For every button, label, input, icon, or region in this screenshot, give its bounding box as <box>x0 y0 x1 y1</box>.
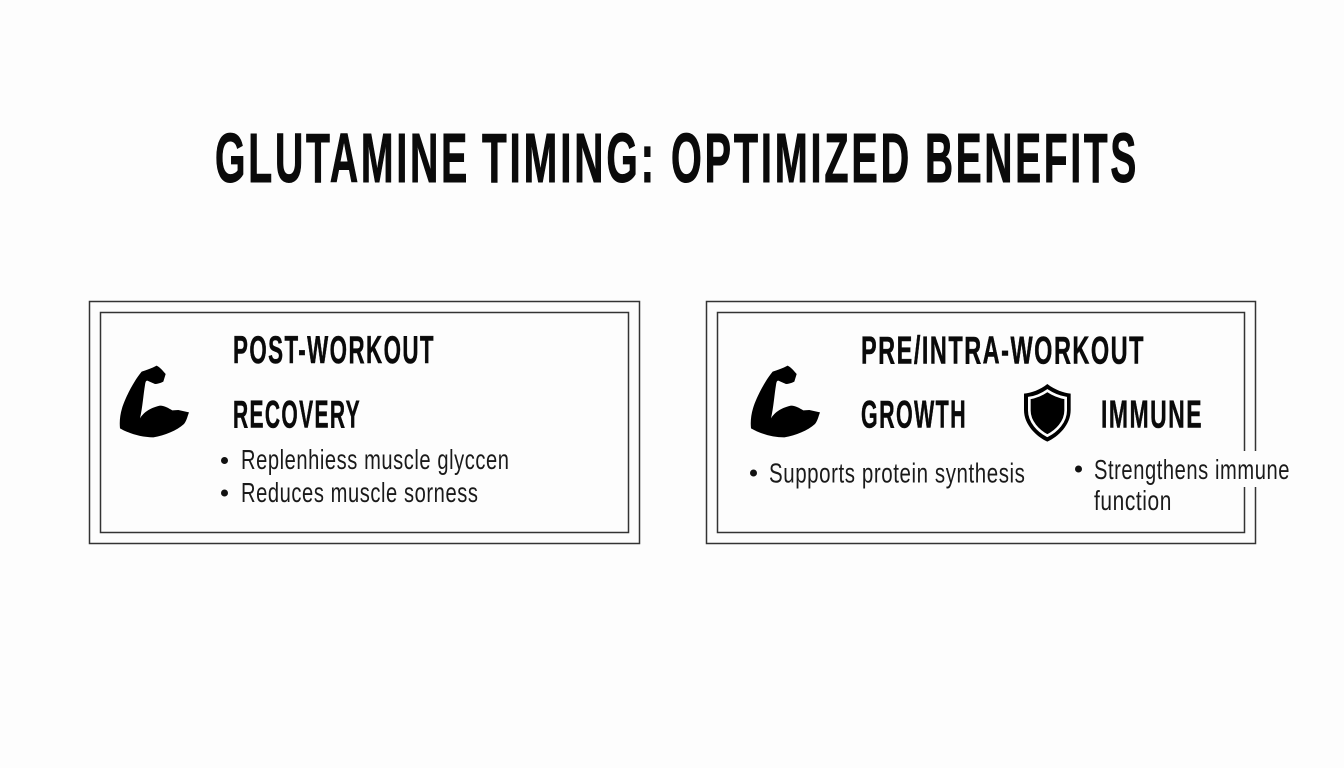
bullet: growth benefit: Supports protein synthesis <box>769 458 1026 488</box>
bullet: immune benefit <box>1075 454 1290 516</box>
bullet list: recovery benefits: Reduces muscle sorness <box>241 477 478 508</box>
title: GLUTAMINE <box>215 119 470 197</box>
panel frame: pre/intra-workout double border <box>706 302 1260 544</box>
heading: post-workout: POST-WORKOUT <box>233 329 435 372</box>
title: TIMING: <box>482 119 657 197</box>
title <box>215 119 1139 197</box>
bullet: growth benefit <box>750 458 1026 488</box>
heading: recovery: RECOVERY <box>233 394 361 436</box>
title: BENEFITS <box>925 119 1139 197</box>
icon: shield <box>1024 384 1071 442</box>
heading: immune: IMMUNE <box>1101 394 1203 436</box>
panel: post-workout <box>90 302 640 544</box>
bullet list: recovery benefits <box>221 444 510 508</box>
panel: pre/intra-workout <box>706 302 1290 544</box>
bullet: immune benefit: function <box>1094 485 1172 516</box>
panel frame: post-workout double border <box>90 302 640 544</box>
heading: pre/intra-workout: PRE/INTRA-WORKOUT <box>861 330 1145 372</box>
icon: flexed muscle arm <box>120 366 189 437</box>
bullet list: recovery benefits: Replenhiess muscle glyccen <box>241 444 510 475</box>
title: OPTIMIZED <box>671 119 912 197</box>
icon: flexed muscle arm <box>751 366 820 437</box>
heading: growth: GROWTH <box>861 394 967 436</box>
